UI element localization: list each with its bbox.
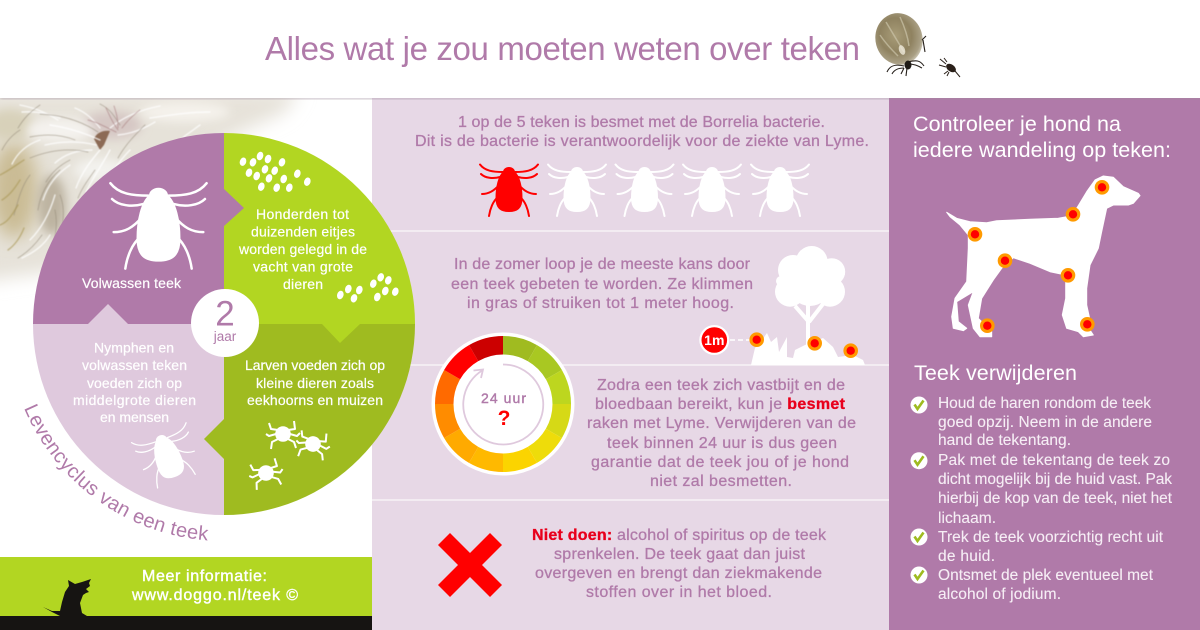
text: 24 hours xyxy=(587,377,856,490)
list item 3: de huid. xyxy=(938,548,995,565)
text: summer risk: in gras of struiken tot 1 meter hoog. xyxy=(467,295,734,312)
text: nymphs: volwassen teken xyxy=(82,357,187,373)
marker: 1 meter xyxy=(699,325,750,355)
photo: dog fur xyxy=(0,90,300,282)
list item 1: Houd de haren rondom de teek xyxy=(938,395,1151,412)
footer text: www.doggo.nl/teek © xyxy=(131,587,298,604)
text: statistic: Dit is de bacterie is verantwoordelijk voor de ziekte van Lyme. xyxy=(415,133,869,150)
heading: remove tick: Teek verwijderen xyxy=(914,361,1077,385)
header band xyxy=(0,0,1200,98)
heading: check your dog: Controleer je hond na xyxy=(913,112,1121,136)
list item 2: hierbij de kop van de teek, niet het xyxy=(938,490,1173,507)
text: do not: sprenkelen. De teek gaat dan juist xyxy=(554,546,806,563)
text: do not xyxy=(532,527,827,601)
list item 3: Trek de teek voorzichtig recht uit xyxy=(938,529,1164,546)
life cycle wheel xyxy=(33,133,415,515)
text: larvae: kleine dieren zoals xyxy=(256,375,374,391)
list item 4 xyxy=(910,566,1154,603)
gauge: 24 hours: 24 uur xyxy=(481,390,526,406)
heading: check your dog: iedere wandeling op teken: xyxy=(913,138,1171,162)
photo: small tick xyxy=(939,58,960,77)
wheel quadrant: nymphs xyxy=(33,304,224,515)
text: summer risk xyxy=(451,256,753,312)
footer text: Meer informatie: xyxy=(142,568,267,585)
text: larvae xyxy=(245,357,385,408)
list item 4: Ontsmet de plek eventueel met xyxy=(938,567,1154,584)
text: eggs: worden gelegd in de xyxy=(238,241,367,257)
section: Borrelia statistic xyxy=(415,114,869,216)
list item 4: alcohol of jodium. xyxy=(938,586,1061,603)
center badge: 2 jaar: 2 xyxy=(215,294,235,334)
text: 24 hours: Zodra een teek zich vastbijt en de xyxy=(597,377,845,394)
text: do not: overgeven en brengt dan ziekmakende xyxy=(535,565,822,582)
section: summer risk xyxy=(451,246,865,365)
gauge: 24 hours: ? xyxy=(498,407,510,430)
text: statistic xyxy=(415,114,869,150)
center badge: 2 jaar xyxy=(191,289,259,357)
text: summer risk: een teek gebeten te worden. Ze klimmen xyxy=(451,276,753,293)
text: 24 hours: raken met Lyme. Verwijderen van de xyxy=(587,415,856,432)
list item 2: lichaam. xyxy=(938,510,996,527)
label: adult tick: Volwassen teek xyxy=(82,275,182,291)
panel: middle background xyxy=(372,98,889,630)
text: 24 hours: teek binnen 24 uur is dus geen xyxy=(607,435,837,452)
text: statistic: 1 op de 5 teken is besmet met de Borrelia bacterie. xyxy=(458,114,825,131)
text: nymphs xyxy=(73,340,196,425)
wheel quadrant: adult tick xyxy=(33,133,224,324)
section: check your dog xyxy=(913,112,1171,337)
text: larvae: Larven voeden zich op xyxy=(245,357,385,373)
icon: eggs xyxy=(239,151,400,303)
tick markers xyxy=(749,332,858,358)
text: eggs xyxy=(238,206,367,292)
list item 1: goed opzij. Neem in de andere xyxy=(938,414,1152,431)
text: 24 hours: bloedbaan bereikt, kun je besmet xyxy=(595,396,846,413)
text: nymphs: middelgrote dieren xyxy=(73,392,196,408)
gauge: 24 hours xyxy=(427,328,579,480)
wheel quadrant: eggs xyxy=(224,133,415,324)
icon: larvae xyxy=(247,421,332,491)
text: nymphs: voeden zich op xyxy=(87,375,182,391)
list item 2 xyxy=(910,452,1173,527)
photo: engorged tick xyxy=(870,8,928,76)
text: eggs: vacht van grote xyxy=(253,259,353,275)
illustration: tree and grass xyxy=(751,246,865,365)
icon row: 1 of 5 ticks xyxy=(480,164,809,216)
header shadow xyxy=(0,96,1200,99)
list item 3 xyxy=(910,528,1164,565)
heading: check your dog xyxy=(913,112,1171,162)
curved caption: Levencyclus van een teek xyxy=(24,404,208,540)
text: do not: stoffen over in het bloed. xyxy=(586,584,772,601)
icon: dog silhouette xyxy=(43,579,91,616)
text: larvae: eekhoorns en muizen xyxy=(247,392,383,408)
list item 1: hand de tekentang. xyxy=(938,432,1071,449)
text: summer risk: In de zomer loop je de meeste kans door xyxy=(454,256,751,273)
tick spots on dog xyxy=(968,180,1109,333)
panel: right background xyxy=(889,98,1200,630)
text: 24 hours: niet zal besmetten. xyxy=(650,473,792,490)
footer band xyxy=(0,557,372,630)
icon: nymph tick xyxy=(132,423,204,491)
section: do not xyxy=(438,527,827,601)
text: eggs: Honderden tot xyxy=(256,206,349,222)
text: do not: Niet doen: alcohol of spiritus op de teek xyxy=(532,527,827,544)
section: 24 hours xyxy=(427,328,856,490)
list item 2: Pak met de tekentang de teek zo xyxy=(938,452,1170,469)
wheel quadrant: larvae xyxy=(224,324,415,515)
text: nymphs: Nymphen en xyxy=(94,340,174,356)
text: eggs: dieren xyxy=(283,276,323,292)
text: nymphs: en mensen xyxy=(100,409,169,425)
marker: 1 meter: 1m xyxy=(704,332,724,348)
illustration: dog silhouette xyxy=(947,176,1140,337)
section: remove tick xyxy=(910,361,1173,603)
list item 1 xyxy=(910,395,1152,449)
icon: red cross xyxy=(438,533,502,597)
title: Alles wat je zou moeten weten over teken xyxy=(265,30,860,67)
text: eggs: duizenden eitjes xyxy=(251,224,355,240)
center badge: 2 jaar: jaar xyxy=(213,329,237,344)
footer text xyxy=(131,568,298,604)
icon: adult tick xyxy=(110,183,207,269)
text: 24 hours: garantie dat de teek jou of je hond xyxy=(591,454,849,471)
list item 2: dicht mogelijk bij de huid vast. Pak xyxy=(938,471,1172,488)
